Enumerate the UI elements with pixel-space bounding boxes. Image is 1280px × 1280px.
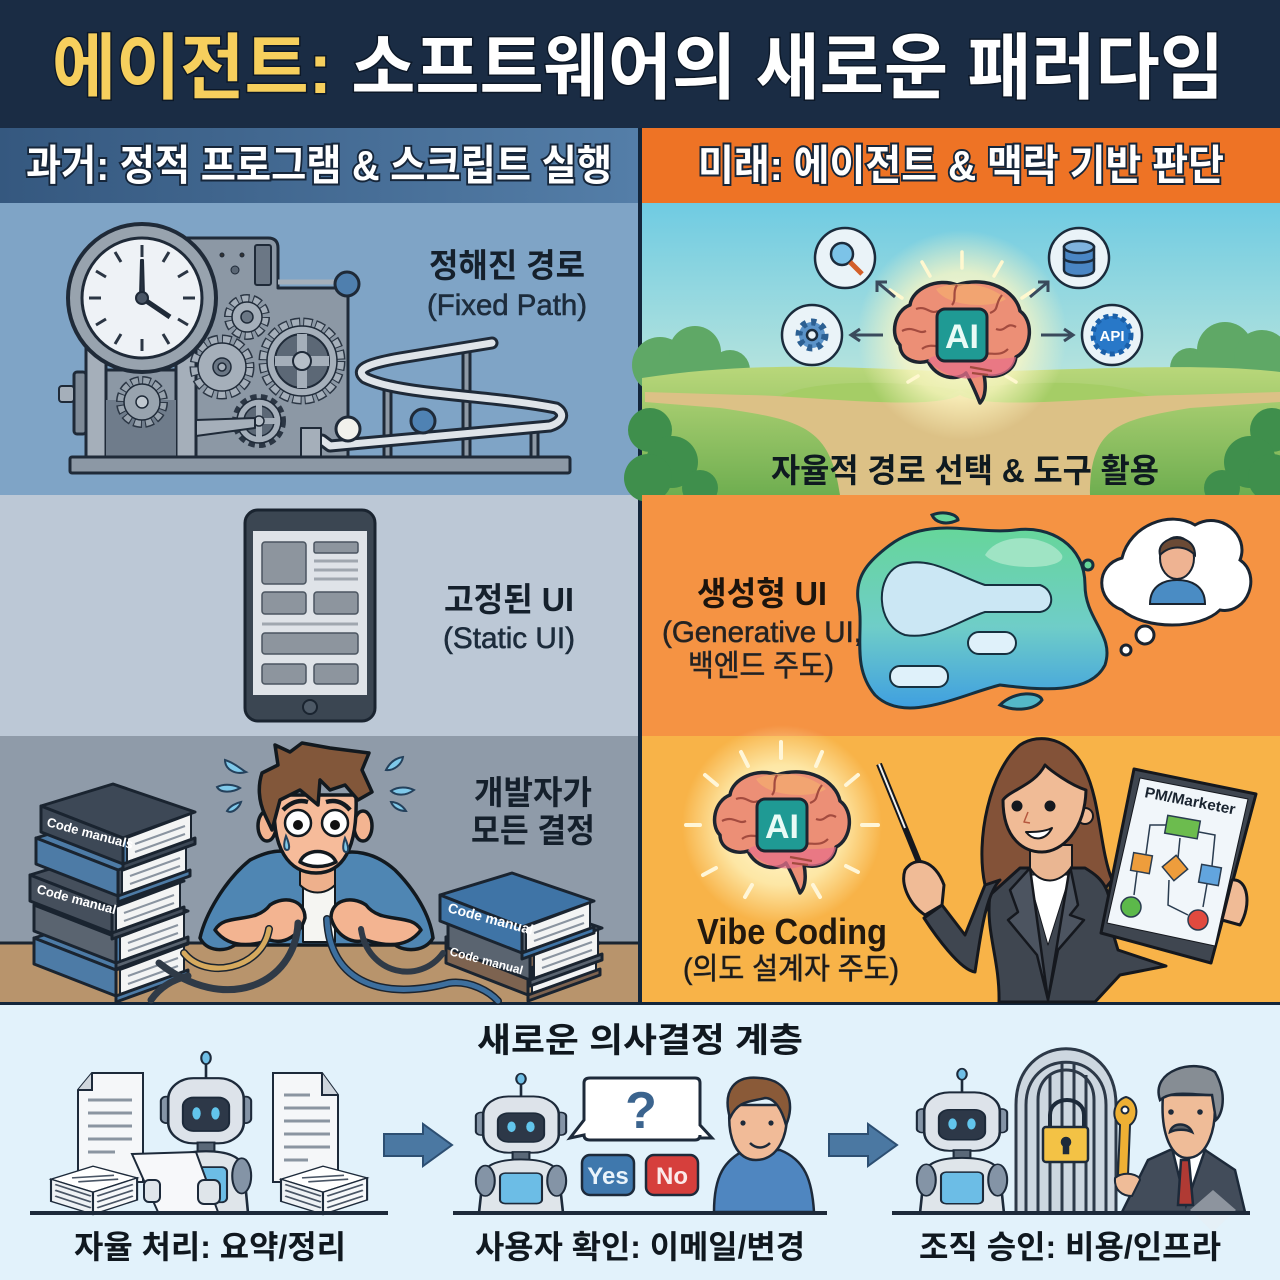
label: fixed path: 정해진 경로	[429, 247, 585, 284]
manager	[1122, 1066, 1245, 1212]
panel: developer decides everything: 모든 결정	[471, 812, 595, 849]
panel: fixed path	[0, 203, 638, 495]
book titles: left: Code manuals	[45, 814, 135, 852]
step 2: user confirmation: ?	[625, 1082, 657, 1140]
clock	[68, 224, 216, 372]
book title: Code manual	[448, 944, 525, 977]
tablet label: PM/Marketer	[1143, 784, 1237, 819]
robot	[476, 1074, 566, 1213]
paper stacks	[51, 1166, 137, 1214]
panel: vibe coding	[642, 725, 1280, 1002]
panel: generative UI: (Generative UI,	[662, 616, 862, 649]
developer	[200, 743, 433, 950]
robot	[161, 1052, 251, 1213]
question bubble	[570, 1078, 712, 1140]
step 2: user confirmation: Yes	[587, 1163, 629, 1190]
arrow	[384, 1124, 452, 1166]
icon: settings gear	[782, 305, 842, 365]
paper held	[132, 1152, 218, 1212]
panel: generative UI: 백엔드 주도)	[688, 650, 834, 683]
panel: past header: 과거: 정적 프로그램 & 스크립트 실행	[26, 142, 612, 189]
robot	[917, 1069, 1007, 1213]
cables	[151, 919, 498, 1001]
panel: generative UI	[642, 495, 1280, 736]
label: autonomous routing: 자율적 경로 선택 & 도구 활용	[771, 452, 1159, 489]
books: left stack	[30, 784, 195, 1002]
rail	[384, 350, 538, 458]
panel: developer decides everything	[0, 736, 638, 1002]
documents	[78, 1073, 338, 1182]
heading: 새로운 의사결정 계층	[477, 1022, 803, 1060]
baseline	[892, 1211, 1250, 1215]
icon: brain AI	[715, 772, 849, 893]
gears	[121, 299, 340, 444]
panel: autonomous routing	[624, 203, 1280, 506]
icon: database	[1049, 228, 1109, 288]
step label: 조직 승인: 비용/인프라	[919, 1229, 1221, 1265]
sweat drops	[217, 757, 414, 852]
panel: past header	[0, 128, 638, 203]
robot hands	[144, 1180, 220, 1204]
panel: future header: 미래: 에이전트 & 맥락 기반 판단	[698, 142, 1224, 189]
step 2: user confirmation	[453, 1074, 827, 1265]
woman with pointer and tablet	[879, 739, 1256, 1002]
icon: API: API	[1099, 328, 1125, 345]
step label: 사용자 확인: 이메일/변경	[475, 1229, 805, 1265]
blob UI	[858, 513, 1107, 709]
panel: static UI: (Static UI)	[443, 622, 575, 655]
book title: Code manual	[446, 899, 535, 938]
step label: 자율 처리: 요약/정리	[74, 1229, 346, 1265]
arrow	[829, 1124, 897, 1166]
yes and no buttons	[582, 1155, 698, 1195]
label: developer: 개발자가	[474, 774, 592, 811]
tablet flowchart	[1121, 815, 1221, 930]
rays	[890, 252, 1034, 382]
arrows: tool links	[851, 282, 1073, 341]
thought bubble with user	[1102, 519, 1251, 655]
books: right stack	[440, 873, 602, 1001]
panel: fixed path: (Fixed Path)	[427, 289, 587, 322]
brain glow	[857, 230, 1067, 440]
step 1: autonomous processing	[30, 1052, 388, 1265]
icon: API	[1082, 305, 1142, 365]
panel: static UI	[0, 495, 638, 736]
label: generative UI: 생성형 UI	[697, 575, 827, 612]
label: vibe coding: Vibe Coding	[697, 911, 887, 952]
label: static UI: 고정된 UI	[444, 581, 574, 618]
icon: brain AI	[895, 282, 1029, 403]
panel: decision hierarchy	[0, 1005, 1280, 1280]
tablet	[1101, 769, 1256, 963]
title text: 에이전트: 소프트웨어의 새로운 패러다임	[52, 29, 1224, 109]
brain glow	[682, 725, 882, 925]
gate	[1016, 1049, 1116, 1212]
machine: clock, gears and rail	[59, 224, 570, 473]
landscape	[624, 322, 1280, 506]
icon: magnifier	[815, 228, 875, 288]
step 2: user confirmation: No	[656, 1163, 688, 1190]
padlock	[1043, 1100, 1088, 1162]
book title: Code manual	[35, 881, 118, 917]
paper stack	[281, 1166, 367, 1214]
watermark gem	[1190, 1190, 1236, 1232]
panel: future header	[642, 128, 1280, 203]
user	[714, 1078, 814, 1212]
icon: phone	[245, 510, 375, 721]
key	[1114, 1097, 1136, 1175]
rays	[686, 742, 878, 897]
baseline	[453, 1211, 827, 1215]
panel: vibe coding: (의도 설계자 주도)	[683, 953, 899, 986]
step 3: organization approval	[892, 1049, 1250, 1265]
baseline	[30, 1211, 388, 1215]
title banner	[0, 0, 1280, 128]
